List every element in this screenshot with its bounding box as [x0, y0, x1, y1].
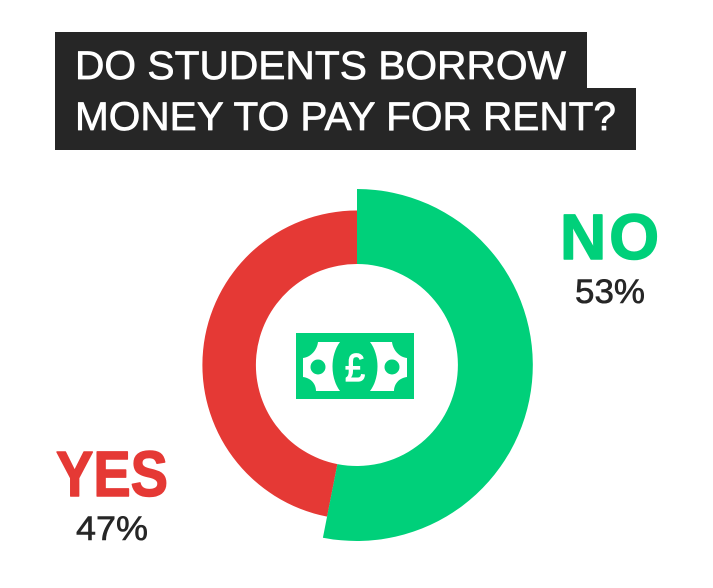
- label: yes: 47%: [76, 510, 148, 548]
- segment: yes 47%: [202, 210, 357, 517]
- segment: no 53%: [323, 189, 533, 541]
- label: no: [560, 201, 662, 311]
- title: MONEY TO PAY FOR RENT?: [75, 95, 616, 139]
- label: no: 53%: [575, 273, 645, 311]
- label: yes: YES: [56, 438, 168, 510]
- title: [55, 32, 636, 150]
- donut chart: [202, 189, 533, 541]
- icon: pound banknote: £: [345, 347, 365, 390]
- icon: pound banknote: [296, 333, 414, 399]
- title: DO STUDENTS BORROW: [75, 44, 566, 88]
- label: yes: [56, 438, 168, 548]
- label: no: NO: [560, 201, 662, 273]
